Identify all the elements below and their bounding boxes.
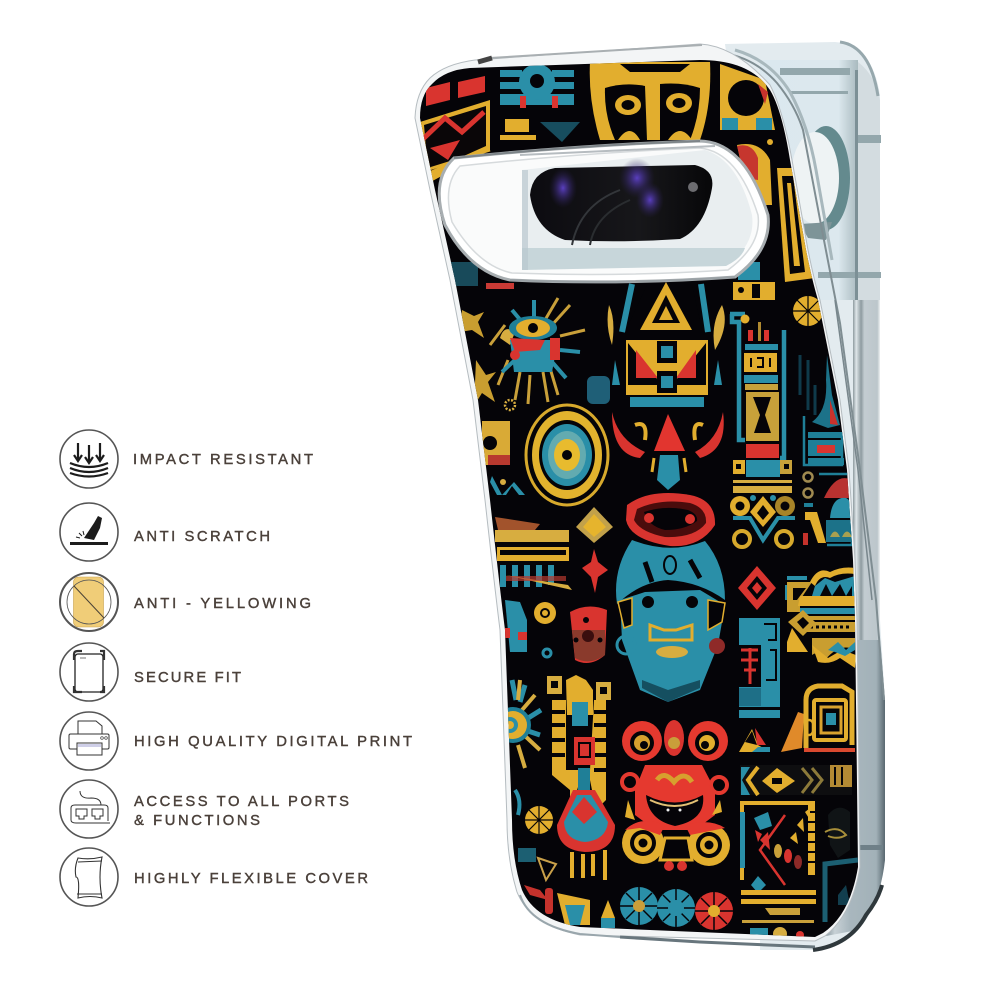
left flower xyxy=(508,680,542,769)
yellow and teal glyph near lens xyxy=(733,262,775,300)
red nose and scrolls xyxy=(612,412,724,490)
top right yellow block xyxy=(720,64,775,130)
yellow and teal chevron band xyxy=(740,765,852,795)
right teal glyph panel xyxy=(739,618,780,718)
dotted circle xyxy=(505,400,515,410)
feature: high quality digital print xyxy=(60,712,412,770)
yellow and teal patterned panel xyxy=(740,801,816,941)
red spiral mask xyxy=(622,720,730,871)
yellow key column xyxy=(777,168,815,282)
teal head xyxy=(616,540,725,702)
small red and teal glyph on left xyxy=(505,600,527,652)
sun with eye xyxy=(490,298,585,404)
red diamond xyxy=(738,566,776,610)
phone camera bar seen through the back xyxy=(791,126,850,240)
yellow sunburst xyxy=(793,296,823,326)
dim right panel xyxy=(825,808,858,922)
central totem top xyxy=(608,282,725,407)
bottom left pieces xyxy=(524,885,615,928)
right yellow and teal panel xyxy=(787,568,856,668)
top left red and yellow panel xyxy=(420,76,490,185)
feature: anti scratch xyxy=(60,503,270,561)
clear case side flap xyxy=(723,50,884,700)
yellow diamond xyxy=(576,507,613,543)
teal hatching xyxy=(518,848,536,862)
small triangle xyxy=(538,858,556,880)
small blue square glyph xyxy=(587,376,610,404)
phone behind the clear case xyxy=(723,42,885,950)
concentric yellow circle xyxy=(526,405,608,505)
feature: anti scratch: ANTI SCRATCH xyxy=(134,529,270,545)
feature: secure fit xyxy=(60,643,241,701)
feature: highly flexible cover xyxy=(60,848,368,906)
small teal figures xyxy=(490,476,525,495)
bottom flowers xyxy=(620,887,733,930)
yellow stars xyxy=(460,310,496,406)
red star xyxy=(582,549,608,593)
red mouth xyxy=(626,493,715,546)
clear case rim xyxy=(415,44,882,950)
small teal ring xyxy=(543,649,551,657)
feature: ports and functions xyxy=(60,780,349,838)
feature: ports and functions: ACCESS TO ALL PORTS xyxy=(134,794,349,810)
striped yellow panel xyxy=(495,517,572,590)
blue grid under the camera xyxy=(448,262,514,289)
small triangle cluster xyxy=(739,728,770,752)
feature: secure fit: SECURE FIT xyxy=(134,670,241,686)
feature: anti yellowing xyxy=(60,573,311,631)
feature: impact resistant xyxy=(60,430,313,488)
yellow figure with flask xyxy=(547,675,615,880)
left teal scroll xyxy=(515,790,519,815)
red and yellow face on right xyxy=(737,139,773,205)
dark camera bar lens xyxy=(530,158,712,245)
patterned tribal artwork on the case xyxy=(420,60,858,937)
feature: ports and functions: & FUNCTIONS xyxy=(134,813,260,829)
feature: highly flexible cover: HIGHLY FLEXIBLE COVER xyxy=(134,871,368,887)
camera cut-out of the case xyxy=(439,141,768,282)
top teal glyph xyxy=(500,64,574,108)
small yellow bars xyxy=(500,119,536,140)
red rounded stone xyxy=(570,606,607,663)
feature: high quality digital print: HIGH QUALITY DIGITAL PRINT xyxy=(134,734,412,750)
exposed phone back in the cut-out xyxy=(522,150,752,270)
small yellow panel xyxy=(482,421,510,465)
right teal and yellow totem column xyxy=(730,314,795,547)
feature: impact resistant: IMPACT RESISTANT xyxy=(133,452,313,468)
features list xyxy=(60,430,412,906)
top yellow mask xyxy=(590,62,710,140)
yellow sun flower xyxy=(525,806,553,834)
yellow flower xyxy=(534,602,556,624)
dim teal leaf xyxy=(540,122,580,142)
feature: anti yellowing: ANTI - YELLOWING xyxy=(134,596,311,612)
far right dark teal totem xyxy=(800,355,852,545)
right yellow maze panel xyxy=(781,686,855,752)
